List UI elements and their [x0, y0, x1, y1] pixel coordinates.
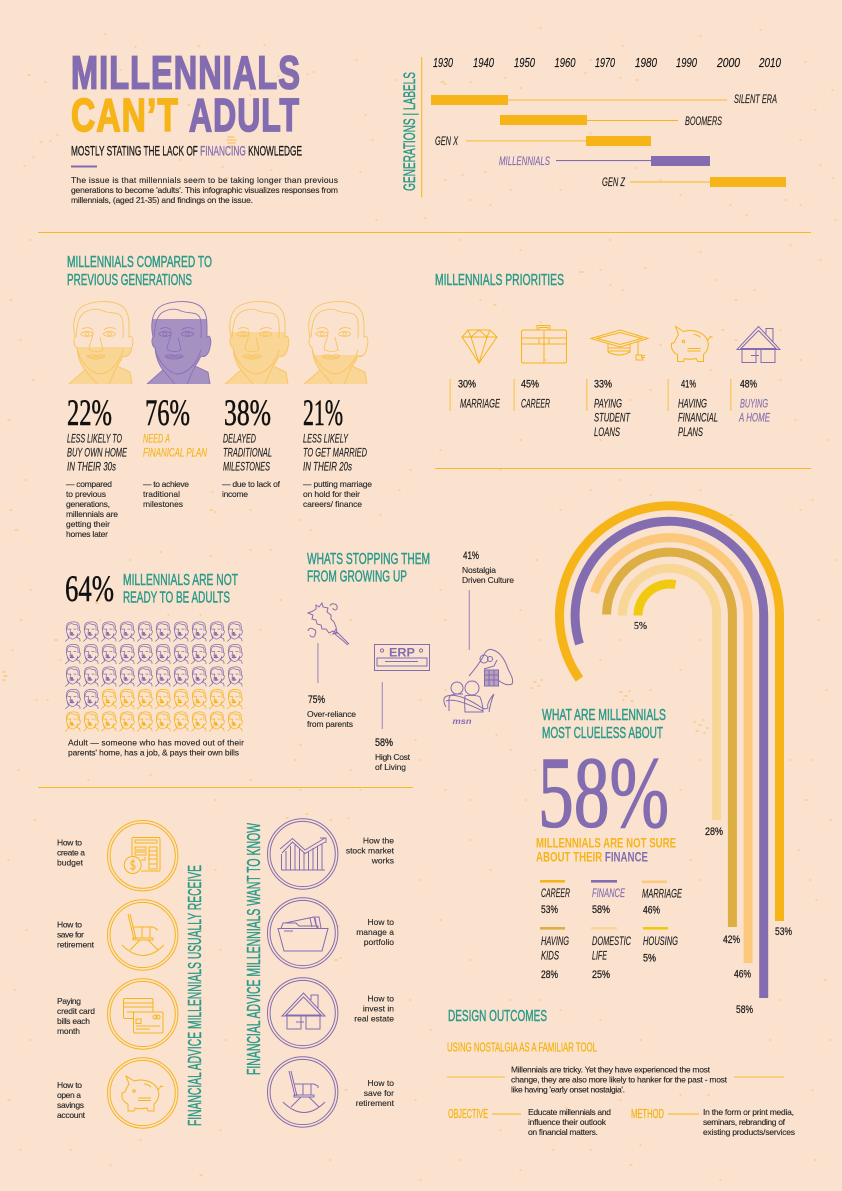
legend: finance: FINANCE: [592, 886, 626, 900]
timeline years: 1940: [473, 56, 494, 70]
icon: house: [737, 326, 780, 362]
rainbow chart value labels: 46%: [734, 969, 751, 981]
stat: high cost of living: High Cost: [375, 752, 411, 762]
priority: career: 45%: [521, 379, 539, 391]
title line: millennials: MILLENNIALS: [71, 47, 301, 99]
timeline years: 1980: [635, 56, 657, 70]
heading: compared to previous generations: MILLENNIALS COMPARED TO: [67, 254, 212, 271]
icon: house purple: [268, 978, 338, 1048]
adult definition: Adult — someone who has moved out of their: [68, 738, 244, 748]
stat: high cost of living: of Living: [375, 762, 406, 772]
legend: finance: 58%: [592, 904, 610, 916]
stat 38 percent: DELAYED: [223, 432, 256, 446]
stat 76 percent: 76%: [145, 393, 190, 434]
stat 22 percent: generations,: [66, 499, 110, 509]
64 percent stat: 64%: [65, 569, 114, 610]
objective block: Educate millennials and: [528, 1107, 611, 1117]
advice text: save for retirement: save for: [364, 1088, 394, 1098]
icon: rocking chair purple: [268, 1057, 338, 1127]
intro paragraph: millennials, (aged 21-35) and findings on the issue.: [71, 195, 253, 205]
msn label: msn: [452, 716, 472, 726]
icon: budget: [108, 820, 178, 891]
boomers bar: BOOMERS: [685, 114, 722, 128]
stat 21 percent: 21%: [303, 393, 343, 434]
heading: whats stopping them: WHATS STOPPING THEM: [307, 551, 430, 568]
housing arc: [638, 584, 676, 616]
legend: having kids: KIDS: [541, 948, 559, 962]
stat 22 percent: 22%: [67, 393, 112, 434]
section rules: [38, 232, 811, 788]
priority: buying a home: A HOME: [738, 411, 771, 425]
intro paragraph: generations to become 'adults'. This infographic visualizes responses from: [71, 185, 338, 195]
gen x bar: GEN X: [435, 134, 459, 148]
rainbow chart value labels: 53%: [775, 926, 792, 938]
stat 22 percent: millennials are: [66, 509, 118, 519]
heading: most clueless about: WHAT ARE MILLENNIALS: [542, 707, 666, 724]
advice text: budget: How to: [57, 838, 82, 848]
advice text: portfolio: portfolio: [364, 937, 394, 947]
legend: housing: [643, 927, 678, 965]
legend: finance: [591, 880, 626, 916]
domestic life arc: [622, 568, 717, 820]
stat 21 percent: [303, 393, 372, 509]
stat 21 percent: LESS LIKELY: [303, 432, 349, 446]
advice text: savings: How to: [57, 1080, 82, 1090]
advice text: portfolio: manage a: [356, 927, 394, 937]
icon: ERP sign: [374, 644, 430, 670]
advice want list: [268, 819, 395, 1127]
finance arc: [575, 521, 764, 998]
advice text: savings: [57, 1080, 86, 1120]
rainbow chart value labels: 42%: [723, 934, 740, 946]
legend: housing: 5%: [643, 953, 656, 965]
career arc: [560, 506, 780, 921]
stat 38 percent: 38%: [224, 393, 271, 434]
finance subheading: [536, 835, 676, 865]
gen z bar: GEN Z: [602, 175, 625, 189]
legend: having kids: HAVING: [541, 934, 569, 948]
advice text: budget: [57, 838, 85, 868]
stat 21 percent: on hold for their: [303, 489, 360, 499]
advice text: save for retirement: How to: [368, 1078, 394, 1088]
stat: high cost of living: [375, 737, 411, 772]
timeline years: 1970: [595, 56, 615, 70]
heading: whats stopping them: FROM GROWING UP: [307, 569, 407, 586]
subheading: using nostalgia: USING NOSTALGIA AS A FAMILIAR TOOL: [447, 1041, 597, 1055]
stat 38 percent: — due to lack of: [222, 479, 281, 489]
connector: nostalgia: [469, 590, 470, 650]
silent era bar: [431, 92, 777, 106]
advice text: credit card: bills each: [57, 1016, 90, 1026]
gen z bar: [602, 175, 786, 189]
stat 22 percent: homes later: [66, 529, 108, 539]
heading: not ready to be adults: READY TO BE ADULTS: [123, 590, 230, 607]
speckle clusters: [3, 137, 708, 733]
heading: design outcomes: DESIGN OUTCOMES: [448, 1008, 547, 1025]
icon: stock chart: [268, 819, 338, 889]
advice text: credit card: Paying: [57, 996, 81, 1006]
icon: briefcase: [522, 326, 566, 363]
timeline years: 1950: [514, 56, 535, 70]
stat: over-reliance: from parents: [307, 719, 353, 729]
heading: priorities: MILLENNIALS PRIORITIES: [435, 272, 564, 289]
title: [71, 47, 301, 141]
stat 38 percent: [222, 393, 281, 499]
icon: diamond: [462, 330, 497, 363]
icon: piggy bank gold: [108, 1058, 178, 1128]
priority: financial plans: HAVING: [678, 397, 707, 411]
finance subheading: MILLENNIALS ARE NOT SURE: [536, 835, 676, 851]
icon: rocking chair gold: [108, 900, 178, 970]
having kids arc: [607, 552, 732, 927]
nostalgia paragraph: Millennials are tricky. Yet they have experienced the most: [511, 1064, 711, 1074]
advice receive list: [57, 820, 178, 1128]
legend: having kids: [540, 927, 569, 981]
rainbow chart value labels: 28%: [705, 826, 723, 838]
advice text: retirement: save for: [57, 930, 84, 940]
heading: whats stopping them: [307, 551, 430, 586]
stat 76 percent: FINANICAL PLAN: [143, 446, 207, 460]
method block: existing products/services: [703, 1127, 795, 1137]
icon: msn butterfly and people: [444, 649, 513, 712]
intro paragraph: The issue is that millennials seem to be taking longer than previous: [71, 175, 338, 185]
advice text: credit card: [57, 996, 95, 1036]
priority: student loans: 33%: [594, 379, 612, 391]
connector: high cost: [382, 682, 383, 729]
silent era bar: SILENT ERA: [734, 92, 777, 106]
legend: marriage: 46%: [643, 904, 660, 916]
heading: not ready to be adults: [123, 572, 238, 607]
advice text: real estate: invest in: [363, 1004, 394, 1014]
objective block: OBJECTIVE: [448, 1106, 488, 1121]
priority: financial plans: FINANCIAL: [678, 411, 718, 425]
priority: marriage: 30%: [458, 379, 476, 391]
advice text: credit card: month: [57, 1026, 80, 1036]
rainbow chart value labels: 58%: [736, 1004, 753, 1016]
priority: marriage: MARRIAGE: [460, 397, 501, 411]
priority: financial plans: 41%: [681, 379, 696, 391]
icon: folder portfolio: [268, 898, 338, 968]
priority: financial plans: PLANS: [678, 425, 703, 439]
icon: feather duster: [308, 603, 349, 645]
legend: domestic life: LIFE: [592, 948, 608, 962]
priority: student loans: LOANS: [594, 425, 620, 439]
advice text: save for retirement: retirement: [356, 1098, 395, 1108]
title line: can't: CAN’T: [71, 89, 179, 141]
marriage arc: [594, 538, 748, 963]
advice text: stock market: works: [371, 855, 394, 865]
big 58 percent stat: 58%: [538, 736, 669, 850]
stat 21 percent: — putting marriage: [303, 479, 372, 489]
stat 76 percent: [143, 393, 207, 509]
stat 38 percent: MILESTONES: [223, 460, 270, 474]
method block: seminars, rebranding of: [703, 1117, 786, 1127]
stat 38 percent: income: [222, 489, 248, 499]
stat 21 percent: IN THEIR 20s: [303, 460, 352, 474]
objective block: on financial matters.: [528, 1127, 598, 1137]
stat: high cost of living: 58%: [375, 737, 393, 749]
priorities tick marks: [450, 379, 731, 411]
legend: domestic life: DOMESTIC: [592, 934, 631, 948]
timeline chart: [421, 56, 786, 197]
advice text: retirement: How to: [57, 920, 82, 930]
nostalgia paragraph: [511, 1064, 728, 1094]
stat 22 percent: IN THEIR 30s: [67, 460, 116, 474]
advice text: stock market: [346, 835, 395, 865]
timeline years: 2010: [758, 56, 781, 70]
connector: over-reliance: [317, 643, 318, 683]
objective block: [448, 1106, 611, 1137]
timeline years: [433, 56, 781, 70]
face 38 percent: [224, 302, 291, 385]
advice text: retirement: [57, 920, 95, 950]
stat 22 percent: — compared: [66, 479, 112, 489]
vertical heading: advice want to know: FINANCIAL ADVICE MILLENNIALS WANT TO KNOW: [244, 823, 264, 1075]
priority: financial plans: [678, 379, 718, 439]
stat: over-reliance: [307, 694, 356, 729]
legend: career: [540, 880, 570, 916]
rainbow radial bar chart: [560, 506, 780, 998]
advice text: real estate: real estate: [354, 1014, 394, 1024]
priority: career: [521, 379, 550, 411]
adult definition: parents' home, has a job, & pays their own bills: [68, 748, 239, 758]
boomers bar: [500, 114, 722, 128]
stat: over-reliance: Over-reliance: [307, 709, 356, 719]
advice text: portfolio: How to: [368, 917, 394, 927]
rainbow chart value labels: 5%: [634, 620, 647, 632]
legend: career: 53%: [541, 904, 558, 916]
timeline axis: [421, 57, 422, 197]
stat 21 percent: careers/ finance: [303, 499, 362, 509]
priority: student loans: PAYING: [594, 397, 622, 411]
advice text: retirement: retirement: [57, 940, 95, 950]
subtitle: MOSTLY STATING THE LACK OF FINANCING KNOWLEDGE: [71, 142, 302, 158]
stat 76 percent: traditional: [143, 489, 180, 499]
legend: marriage: MARRIAGE: [642, 886, 683, 900]
icon: ERP sign: ERP: [389, 646, 415, 660]
millennials bar: [499, 154, 710, 168]
legend: housing: HOUSING: [643, 934, 678, 948]
stat 22 percent: LESS LIKELY TO: [67, 432, 122, 446]
timeline years: 1960: [554, 56, 576, 70]
advice text: real estate: How to: [368, 994, 394, 1004]
timeline years: 1990: [676, 56, 697, 70]
timeline years: 2000: [716, 56, 740, 70]
vertical heading: advice usually receive: FINANCIAL ADVICE MILLENNIALS USUALLY RECEIVE: [185, 865, 205, 1126]
objective block: influence their outlook: [528, 1117, 607, 1127]
heading: compared to previous generations: PREVIOUS GENERATIONS: [67, 272, 192, 289]
priority: student loans: STUDENT: [594, 411, 631, 425]
legend: domestic life: [591, 927, 631, 981]
face 22 percent: [68, 302, 135, 385]
adult definition: [68, 738, 244, 758]
advice text: savings: account: [57, 1110, 86, 1120]
advice text: savings: open a: [57, 1090, 81, 1100]
advice text: stock market: stock market: [346, 845, 395, 855]
stat 21 percent: TO GET MARRIED: [303, 446, 367, 460]
advice text: save for retirement: [356, 1078, 395, 1108]
rainbow chart value labels: [634, 620, 792, 1016]
gen x bar: [435, 134, 651, 148]
stat 76 percent: — to achieve: [143, 479, 189, 489]
finance subheading: ABOUT THEIR FINANCE: [536, 849, 648, 865]
stat 38 percent: TRADITIONAL: [223, 446, 272, 460]
face 21 percent: [303, 302, 370, 385]
stat: nostalgia: [462, 550, 514, 585]
millennials bar: MILLENNIALS: [499, 154, 550, 168]
advice text: credit card: credit card: [57, 1006, 95, 1016]
stat: nostalgia: Nostalgia: [462, 565, 496, 575]
nostalgia paragraph: like having 'early onset nostalgia'.: [511, 1084, 625, 1094]
priority: marriage: [458, 379, 501, 411]
short rule under subtitle: [71, 166, 97, 168]
stat 22 percent: to previous: [66, 489, 106, 499]
legend: marriage: [642, 880, 683, 916]
priority: buying a home: BUYING: [740, 397, 768, 411]
icon: piggy bank: [672, 326, 712, 362]
pictogram grid of faces: [65, 622, 242, 732]
nostalgia paragraph: change, they are also more likely to hanker for the past - most: [511, 1074, 728, 1084]
priority: student loans: [594, 379, 631, 439]
advice text: portfolio: [356, 917, 394, 947]
stat: nostalgia: Driven Culture: [462, 575, 514, 585]
advice text: stock market: How the: [363, 835, 394, 845]
intro paragraph: [71, 175, 338, 205]
advice text: real estate: [354, 994, 394, 1024]
priority: buying a home: [738, 379, 771, 425]
legend: having kids: 28%: [541, 969, 558, 981]
stat 22 percent: getting their: [66, 519, 110, 529]
priority: buying a home: 48%: [740, 379, 757, 391]
heading: not ready to be adults: MILLENNIALS ARE NOT: [123, 572, 238, 589]
nostalgia rules: [447, 1076, 784, 1078]
stat 76 percent: milestones: [143, 499, 183, 509]
method block: METHOD: [631, 1106, 664, 1121]
heading: most clueless about: MOST CLUELESS ABOUT: [542, 725, 663, 742]
face 76 percent: [146, 302, 213, 385]
method block: In the form or print media,: [703, 1107, 794, 1117]
stat 22 percent: BUY OWN HOME: [67, 446, 128, 460]
priority: career: CAREER: [521, 397, 550, 411]
stat: over-reliance: 75%: [308, 694, 325, 706]
method block: [631, 1106, 795, 1137]
icon: credit cards: [108, 979, 178, 1049]
legend: domestic life: 25%: [592, 969, 610, 981]
legend: career: CAREER: [541, 886, 570, 900]
timeline years: 1930: [433, 56, 453, 70]
icon: graduation cap: [591, 330, 648, 360]
heading: compared to previous generations: [67, 254, 212, 289]
title line: adult: ADULT: [189, 89, 300, 141]
stat 76 percent: NEED A: [143, 432, 170, 446]
advice text: budget: create a: [57, 848, 85, 858]
advice text: budget: budget: [57, 858, 84, 868]
stat: nostalgia: 41%: [463, 550, 479, 562]
stat 22 percent: [66, 393, 128, 539]
heading: most clueless about: [542, 707, 666, 742]
advice text: savings: savings: [57, 1100, 84, 1110]
